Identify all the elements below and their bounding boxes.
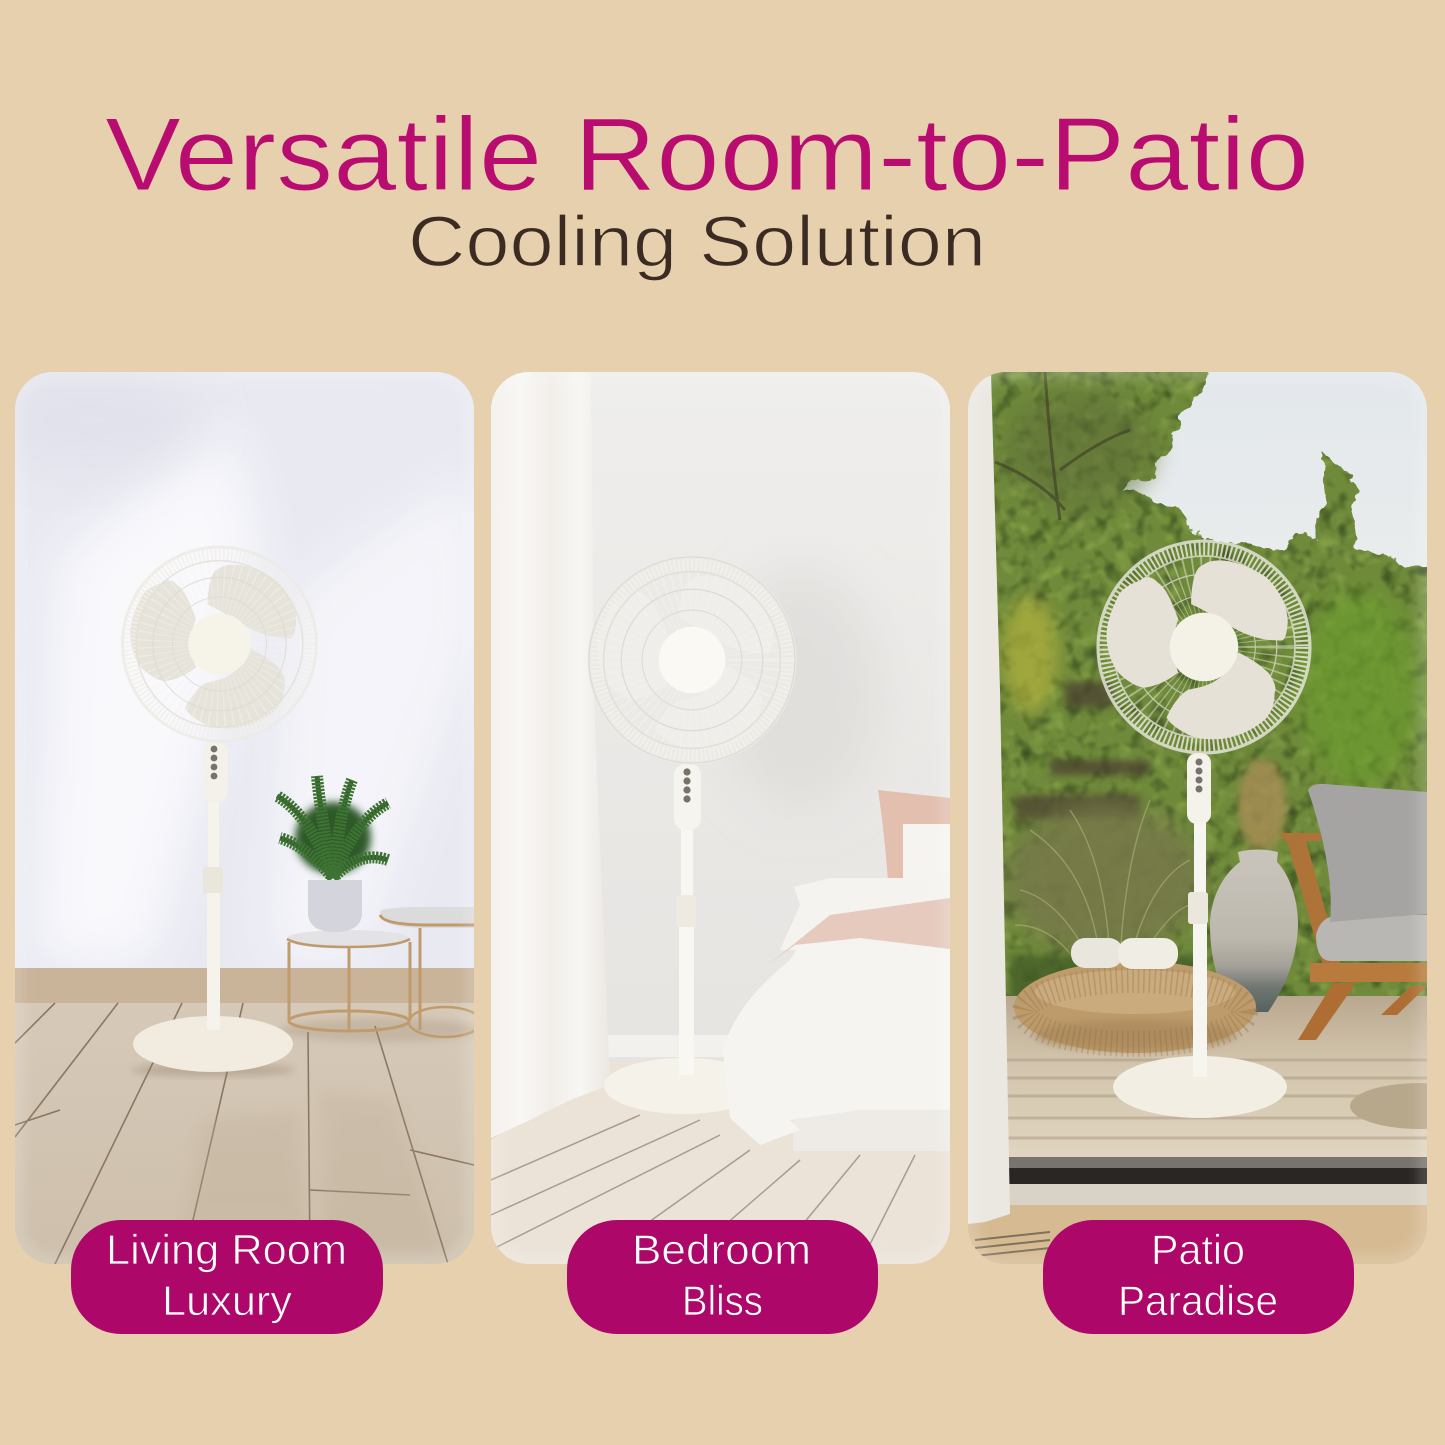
side tables: [287, 907, 481, 1037]
fan: [1098, 541, 1310, 1118]
label pill: bedroom: [567, 1220, 878, 1334]
subtitle: Cooling Solution: [408, 203, 986, 282]
panel: patio: [968, 360, 1445, 1264]
bottom left slats: [975, 1232, 1050, 1256]
panel: bedroom: [491, 372, 950, 1264]
label pill: patio: Patio: [1151, 1226, 1245, 1273]
label pill: living room: Luxury: [162, 1277, 292, 1324]
wall: [491, 372, 950, 1072]
potted plant: [277, 776, 388, 932]
bed: [723, 790, 950, 1151]
label pill: patio: Paradise: [1118, 1277, 1278, 1324]
clay vase: [1210, 850, 1298, 1012]
rolled towels: [1071, 938, 1178, 969]
panel edge fade: [491, 798, 950, 1248]
panel edge fade: [15, 924, 474, 1264]
wood floor: [15, 1003, 480, 1264]
curtain: [968, 372, 1010, 1224]
wall: [0, 370, 474, 972]
sky: [968, 372, 1427, 568]
outdoor chair: [1278, 784, 1427, 1040]
fan: [122, 547, 317, 1072]
label pill: living room: [71, 1220, 383, 1334]
wooden deck: [968, 996, 1445, 1264]
label pill: patio: [1043, 1220, 1354, 1334]
woven pouf: [1014, 938, 1256, 1053]
ornamental grass: [1015, 800, 1190, 960]
panel edge fade: [968, 372, 1427, 1264]
label pill: living room: Living Room: [106, 1226, 347, 1273]
label pill: bedroom: Bedroom: [632, 1226, 811, 1273]
panel: living room: [0, 370, 481, 1264]
baseboard: [15, 968, 474, 1004]
label pill: bedroom: Bliss: [682, 1277, 763, 1324]
foliage: [985, 360, 1440, 1010]
baseboard: [608, 1035, 738, 1057]
curtain: [491, 372, 610, 1138]
fan: [589, 557, 795, 1114]
title: Versatile Room-to-Patio: [105, 97, 1309, 213]
dried plant stems: [1238, 759, 1286, 851]
wood floor: [491, 1062, 950, 1264]
